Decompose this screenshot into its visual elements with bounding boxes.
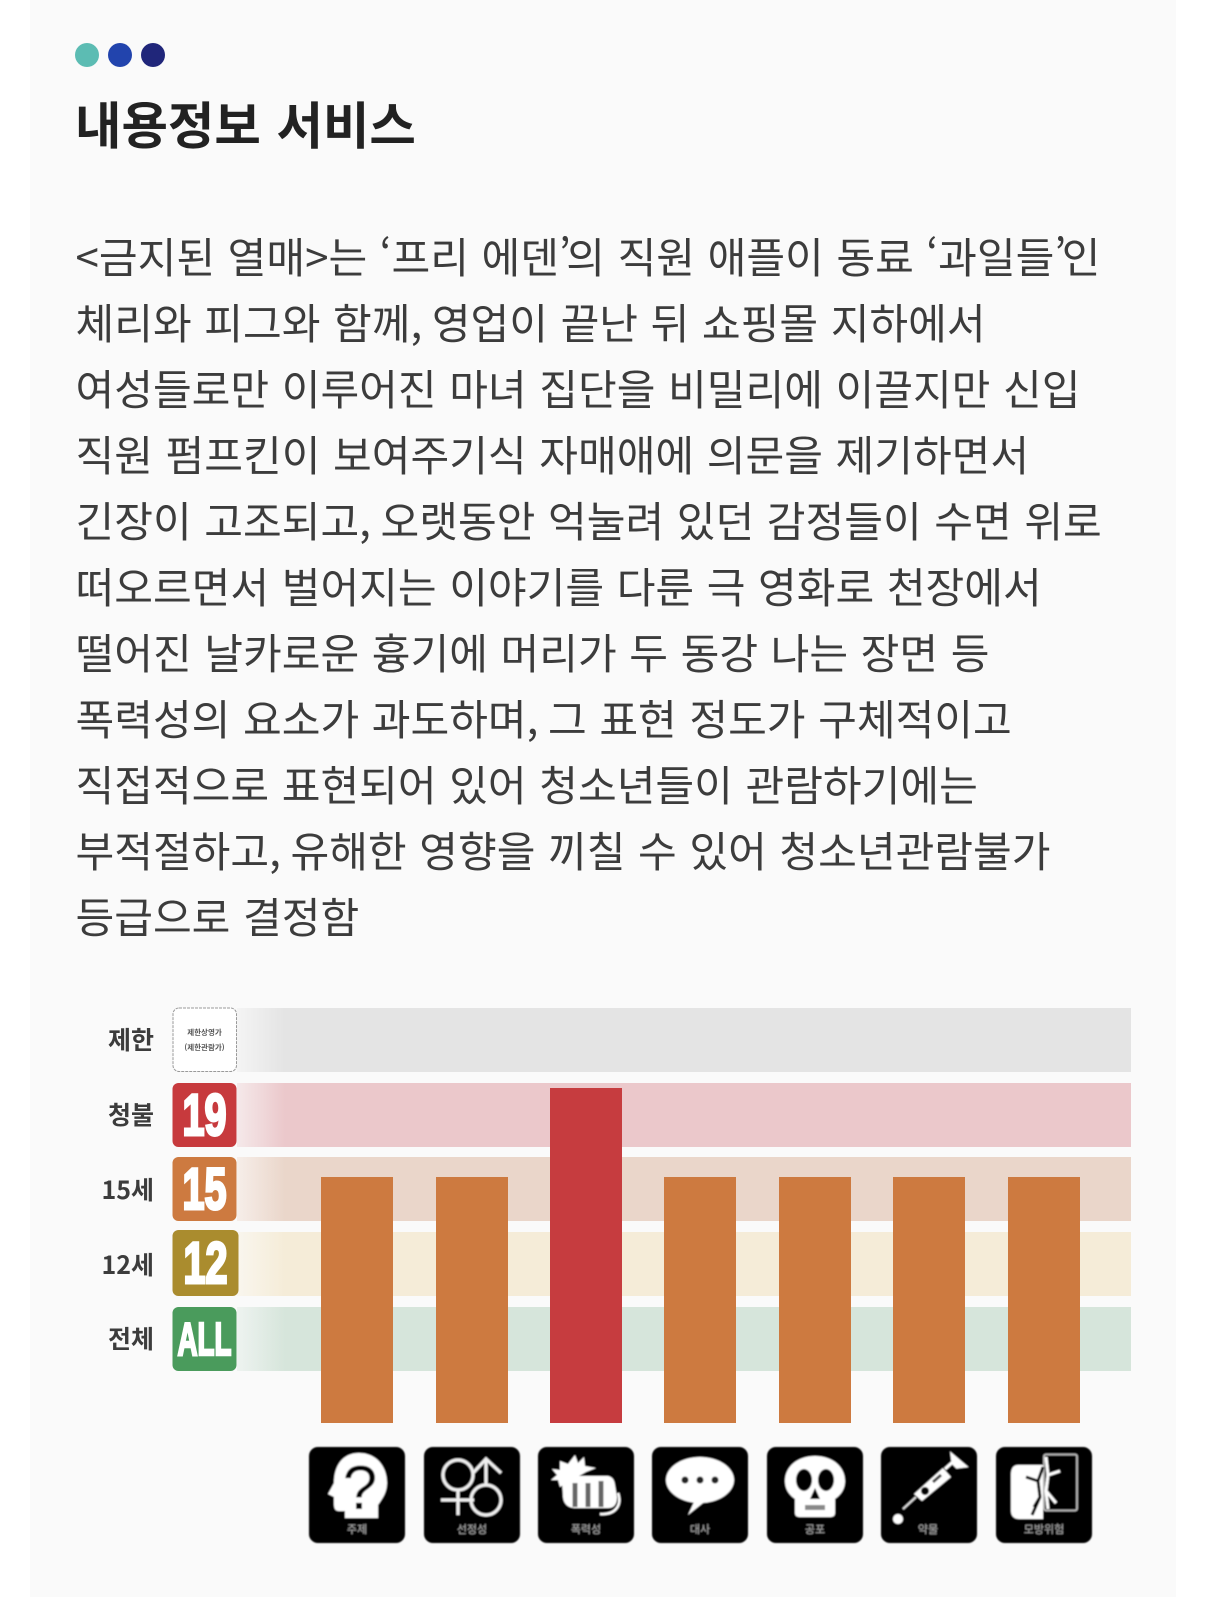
bar: drugs [893,1177,965,1423]
badge: 12: 12 [184,1231,228,1296]
icon: theme: ? [343,1454,377,1523]
badge: all [172,1307,236,1371]
icon: theme: 주제 [347,1521,367,1537]
chart: content rating by category [101,1008,1131,1544]
bar: dialogue [664,1177,736,1423]
text block: rating description [76,224,1102,946]
icon: fear: 공포 [805,1521,825,1537]
icon: dialogue [652,1447,748,1543]
text block: rating description: 여성들로만 이루어진 마녀 집단을 비밀리에 이끌지만 신입 [76,356,1080,418]
badge: restricted: 제한상영가 [187,1027,222,1038]
text block: rating description: 직원 펌프킨이 보여주기식 자매애에 의문을 제기하면서 [76,422,1029,484]
rating band: 15 [237,1157,1131,1221]
icon: violence [538,1447,634,1543]
text block: rating description: 등급으로 결정함 [76,884,359,946]
bar: theme [321,1177,393,1423]
rating band: restricted [237,1008,1131,1072]
row label: all ages: 전체 [108,1320,154,1356]
text block: rating description: 폭력성의 요소가 과도하며, 그 표현 정도가 구체적이고 [76,686,1012,748]
rating band: 12 [237,1232,1131,1296]
text block: rating description: 떨어진 날카로운 흉기에 머리가 두 동강 나는 장면 등 [76,620,989,682]
row label: restricted: 제한 [108,1021,154,1057]
icon: fear [767,1447,863,1543]
icon: three decorative dots [75,43,165,67]
text block: rating description: 직접적으로 표현되어 있어 청소년들이 관람하기에는 [76,752,978,814]
row label: age 15: 15세 [101,1171,154,1207]
badge: 15: 15 [182,1157,226,1222]
rating band: 19 [237,1083,1131,1147]
row label: age 12: 12세 [101,1246,154,1282]
text block: rating description: 떠오르면서 벌어지는 이야기를 다룬 극 영화로 천장에서 [76,554,1042,616]
icon: violence: 폭력성 [571,1521,601,1537]
bar: fear [779,1177,851,1423]
bar: imitation risk [1008,1177,1080,1423]
heading: 내용정보 서비스 [75,85,416,159]
row label: no minors: 청불 [108,1096,154,1132]
badge: restricted: (제한관람가) [184,1042,225,1053]
icon: sexuality [424,1447,520,1543]
icon: drugs: 약물 [918,1521,938,1537]
text block: rating description: 부적절하고, 유해한 영향을 끼칠 수 있어 청소년관람불가 [76,818,1050,880]
badge: all: ALL [178,1313,232,1365]
icon: sexuality: 선정성 [457,1521,487,1537]
bar: violence [550,1088,622,1423]
badge: restricted [173,1008,236,1072]
badge: 19: 19 [182,1083,226,1148]
bar: sexuality [436,1177,508,1423]
icon: imitation risk: 모방위험 [1024,1521,1064,1537]
icon: dialogue: 대사 [690,1521,710,1537]
text block: rating description: <금지된 열매>는 ‘프리 에덴’의 직원 애플이 동료 ‘과일들’인 [76,224,1100,286]
text block: rating description: 긴장이 고조되고, 오랫동안 억눌려 있던 감정들이 수면 위로 [76,488,1102,550]
text block: rating description: 체리와 피그와 함께, 영업이 끝난 뒤 쇼핑몰 지하에서 [76,290,986,352]
icon: imitation risk [996,1447,1092,1543]
icon: drugs [881,1447,977,1543]
rating band: all [237,1307,1131,1371]
icon: theme [309,1447,405,1543]
